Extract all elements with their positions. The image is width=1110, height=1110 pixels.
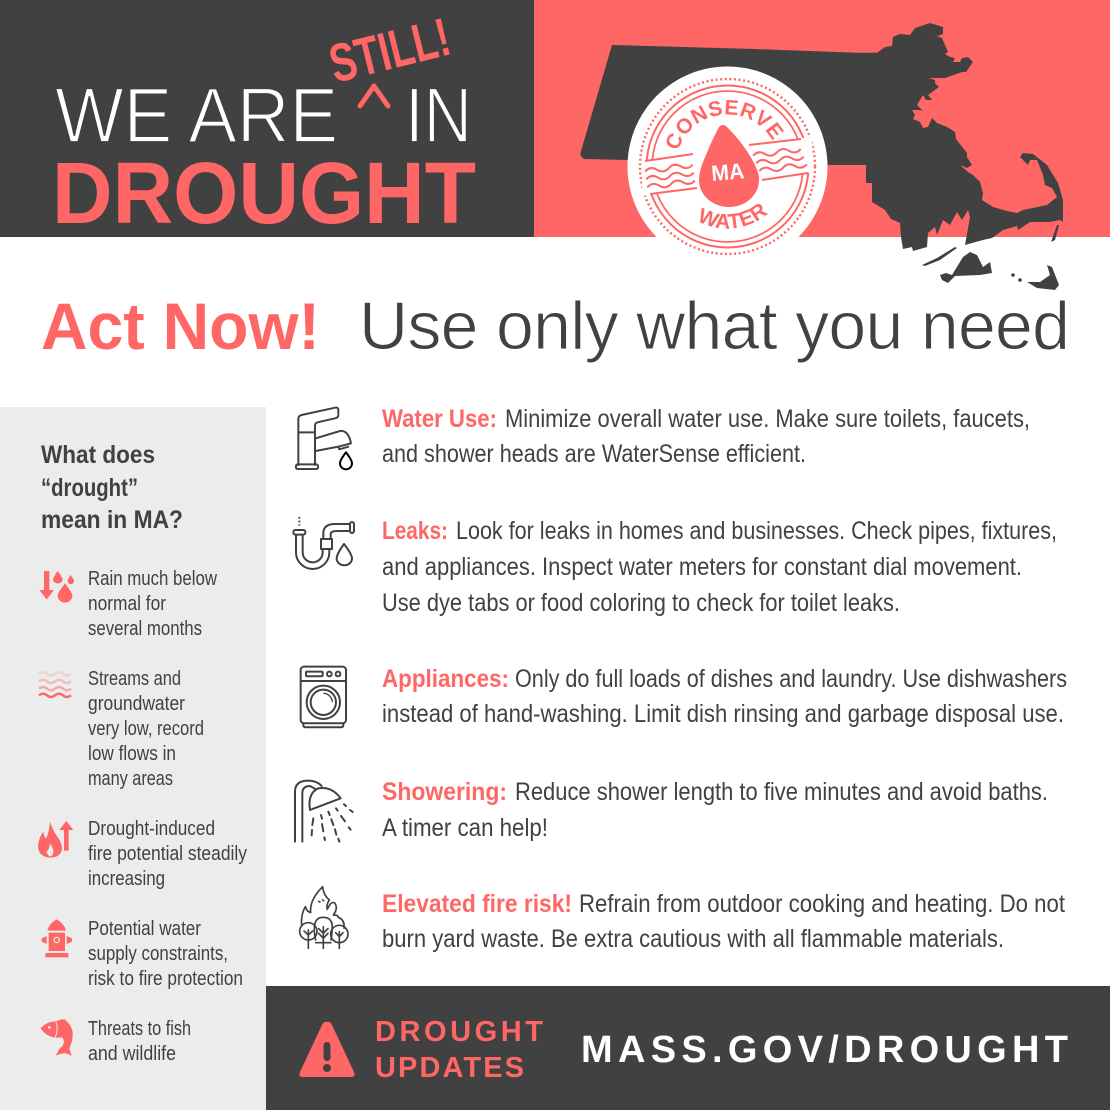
badge text: water: WATER <box>700 204 768 229</box>
text: water supply: risk to fire protection <box>88 968 243 990</box>
title word: drought: DROUGHT <box>52 145 476 242</box>
text: water use: Water Use: <box>382 405 497 433</box>
title line: we are in: WE ARE <box>55 71 338 159</box>
icon: washing machine <box>301 667 346 727</box>
text: web address: MASS.GOV/DROUGHT <box>581 1029 1068 1071</box>
text: rain: Rain much below <box>88 568 217 590</box>
text: fire potential: increasing <box>88 868 165 890</box>
headline: act now: Use only what you need <box>359 288 1070 364</box>
panel heading <box>41 441 183 534</box>
badge text: MA: MA <box>710 158 745 186</box>
text: leaks <box>382 517 1057 617</box>
panel heading: mean in MA? <box>41 506 183 534</box>
icon: fire hydrant <box>42 919 72 957</box>
text: drought updates <box>375 1016 543 1084</box>
text: fish: Threats to fish <box>88 1018 191 1040</box>
icon: rain falling <box>39 571 74 603</box>
text: showering: Reduce shower length to five minutes and avoid baths. <box>515 778 1048 806</box>
text: streams: many areas <box>88 768 173 790</box>
text: showering: A timer can help! <box>382 814 548 842</box>
badge waves left <box>645 154 697 194</box>
text: water supply: Potential water <box>88 918 201 940</box>
badge water drop <box>699 125 759 207</box>
text: water supply <box>88 918 243 990</box>
text: elevated fire risk: burn yard waste. Be extra cautious with all flammable materials. <box>382 925 1004 953</box>
text: rain: several months <box>88 618 202 640</box>
text: rain: normal for <box>88 593 166 615</box>
text: fish: and wildlife <box>88 1043 176 1065</box>
text: elevated fire risk <box>382 890 1065 953</box>
title line: we are in: IN <box>405 71 472 159</box>
map of Massachusetts <box>580 23 1063 290</box>
icon: forest fire <box>300 887 348 948</box>
text: streams: groundwater <box>88 693 185 715</box>
text: rain <box>88 568 217 640</box>
headline: act now: Act Now! <box>41 289 320 363</box>
text: fire potential: fire potential steadily <box>88 843 247 865</box>
icon: leaking pipe <box>293 517 354 569</box>
text: streams <box>88 668 204 790</box>
text: drought updates: UPDATES <box>375 1052 524 1084</box>
icon: shower <box>295 781 353 842</box>
badge text: conserve: CONSERVE <box>666 100 784 148</box>
text: fire potential: Drought-induced <box>88 818 215 840</box>
panel: footer <box>266 986 1110 1110</box>
text: streams: Streams and <box>88 668 181 690</box>
text: leaks: Use dye tabs or food coloring to check for toilet leaks. <box>382 589 900 617</box>
text: elevated fire risk: Elevated fire risk! <box>382 890 572 918</box>
badge waves right <box>749 139 808 180</box>
text: water use <box>382 405 1030 468</box>
icon: warning triangle <box>299 1022 355 1077</box>
panel: what does drought mean <box>0 407 266 1110</box>
handwritten insert: still! <box>323 7 456 106</box>
text: leaks: Leaks: <box>382 517 448 545</box>
text: streams: very low, record <box>88 718 204 740</box>
icon: fish <box>41 1019 73 1056</box>
text: fish <box>88 1018 191 1065</box>
badge: conserve MA water seal <box>628 66 828 256</box>
text: drought updates: DROUGHT <box>375 1016 543 1048</box>
icon: faucet <box>296 408 352 469</box>
text: fire potential <box>88 818 247 890</box>
icon: fire rising <box>38 821 73 858</box>
panel heading: What does <box>41 441 155 469</box>
text: leaks: and appliances. Inspect water meters for constant dial movement. <box>382 553 1022 581</box>
panel: coral header background <box>534 0 1110 237</box>
text: appliances: Appliances: <box>382 665 509 693</box>
icon: low water waves <box>39 672 71 697</box>
text: streams: low flows in <box>88 743 176 765</box>
text: showering <box>382 778 1048 842</box>
text: showering: Showering: <box>382 778 507 806</box>
text: water use: Minimize overall water use. Make sure toilets, faucets, <box>505 405 1030 433</box>
panel heading: “drought” <box>41 474 138 502</box>
text: appliances <box>382 665 1067 728</box>
text: water supply: supply constraints, <box>88 943 228 965</box>
text: water use: and shower heads are WaterSense efficient. <box>382 440 806 468</box>
headline: act now <box>41 288 1070 364</box>
panel: dark header with title <box>0 0 534 242</box>
